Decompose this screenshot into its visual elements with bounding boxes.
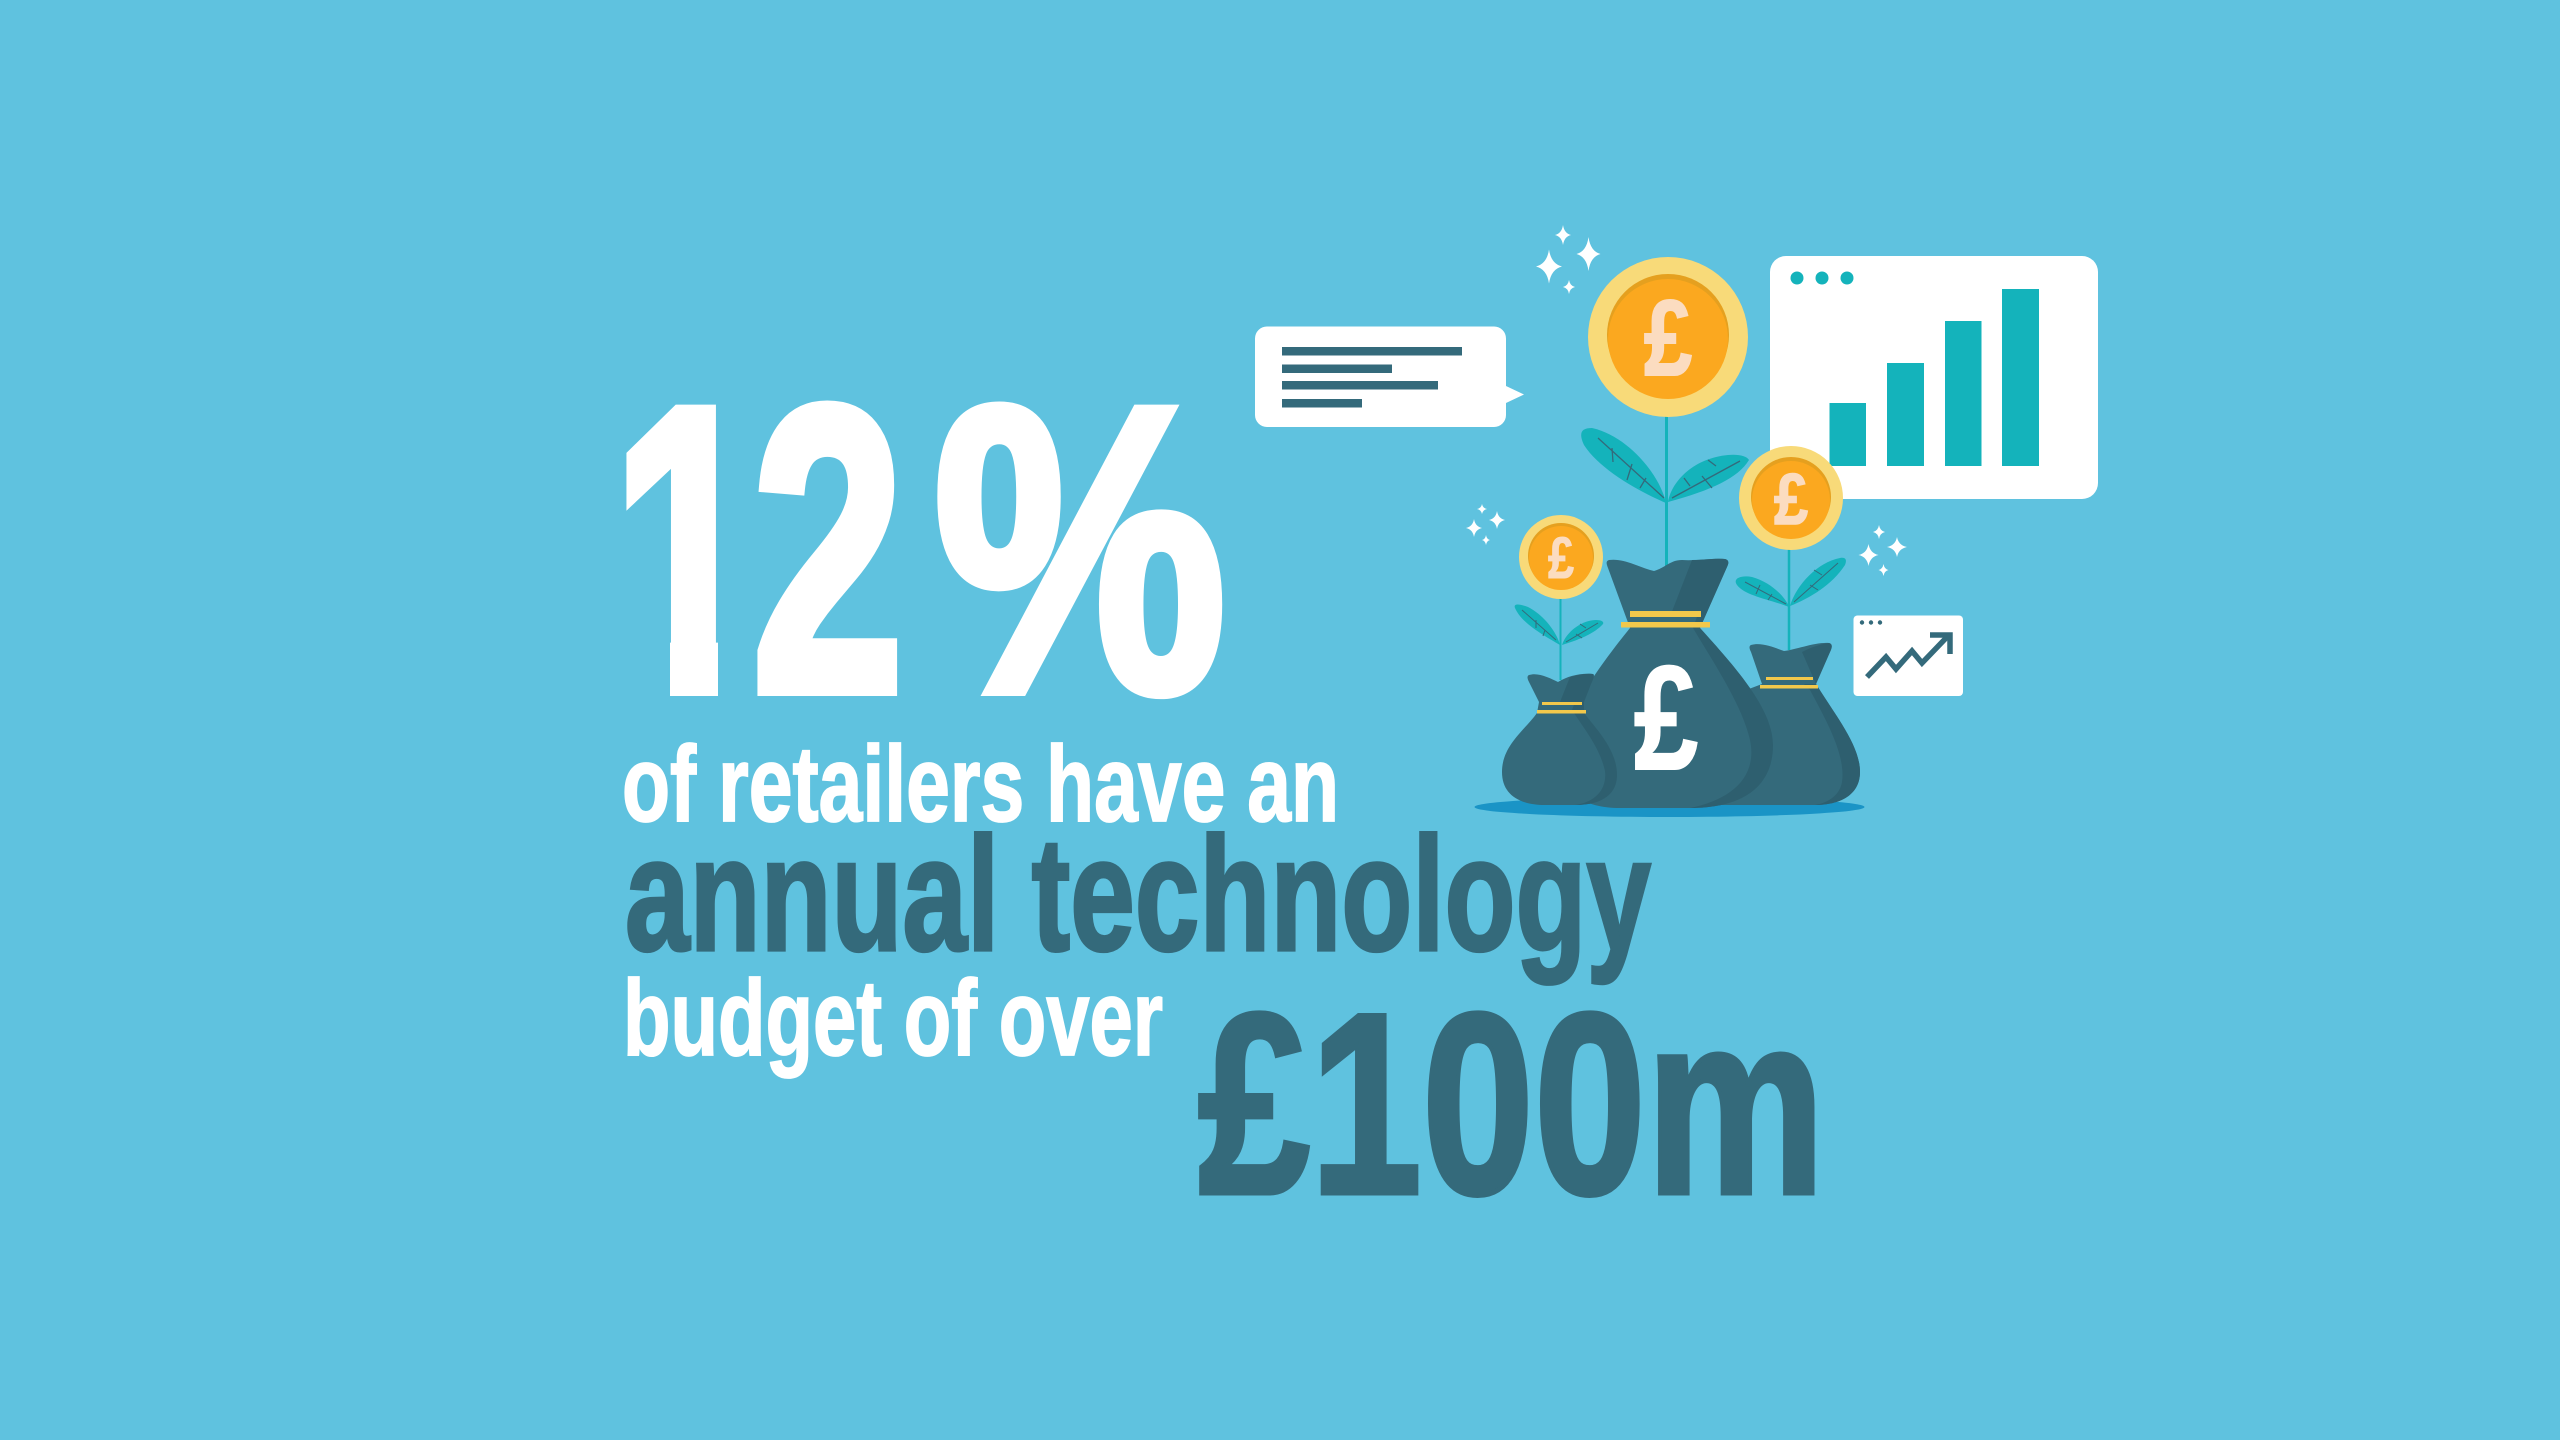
- icon: right coin: £: [1774, 460, 1808, 540]
- headline: 12%: 2: [752, 323, 904, 777]
- icon: ground shadow: [1474, 797, 1864, 817]
- plant: left stem and leaves: [1515, 595, 1603, 680]
- icon: sparkles top: [1536, 225, 1600, 294]
- icon: right money bag: [1720, 643, 1860, 805]
- icon: large coin: [1588, 257, 1748, 417]
- figure: £100m: £100m: [1198, 959, 1825, 1248]
- panel: bar chart window: [1770, 256, 2098, 499]
- plant: right stem and leaves: [1736, 545, 1846, 650]
- panel: small line chart window: [1854, 616, 1963, 696]
- headline: 12%: [626, 400, 1222, 700]
- icon: sparkles left: [1466, 504, 1505, 545]
- headline: 12%: %: [934, 323, 1226, 777]
- text: of retailers have an: of retailers have an: [622, 723, 1339, 844]
- icon: left money bag: [1502, 674, 1617, 805]
- text: budget of over: budget of over: [623, 957, 1163, 1078]
- icon: large money bag: [1560, 559, 1773, 808]
- icon: sparkles right: [1858, 525, 1907, 576]
- icon: large money bag: £: [1634, 636, 1698, 801]
- illustration: money bags growing coins: [1255, 225, 2098, 817]
- plant: centre stem and leaves: [1581, 410, 1749, 570]
- headline: 12%: 1: [612, 323, 762, 777]
- icon: left coin: [1519, 515, 1603, 599]
- text: annual technology: annual technology: [625, 804, 1651, 985]
- icon: right coin: [1739, 446, 1843, 550]
- icon: large coin: £: [1644, 277, 1692, 398]
- icon: left coin: £: [1548, 526, 1574, 591]
- panel: speech bubble: [1255, 326, 1524, 427]
